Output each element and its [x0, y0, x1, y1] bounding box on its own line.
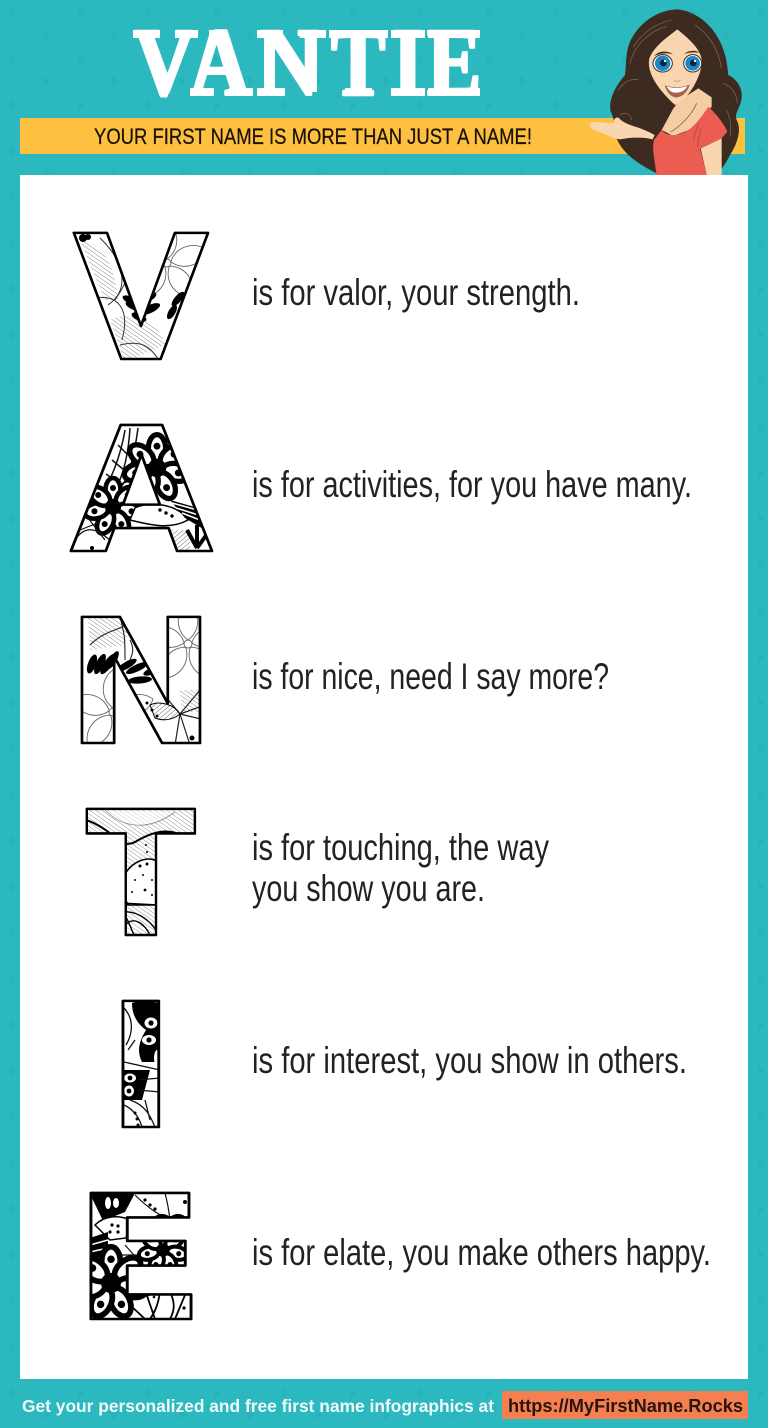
letter A with doodle pattern: A: [70, 391, 213, 593]
shirt: [653, 107, 727, 175]
hair: [610, 9, 742, 175]
letter I with doodle pattern: I: [106, 966, 176, 1168]
eyebrows and mouth: [654, 51, 699, 97]
neck strand: [671, 103, 697, 132]
letter V with doodle pattern: V: [73, 199, 209, 401]
letter E with doodle pattern: E: [73, 1160, 205, 1361]
line text: T: you show you are.: [252, 868, 485, 909]
title: VANTIE: [134, 10, 481, 116]
N black drops: [86, 651, 152, 684]
line text: T: [252, 827, 549, 909]
V black drops: [79, 234, 186, 324]
footer url badge: [502, 1391, 748, 1419]
letter I with doodle pattern: I: [106, 966, 176, 1168]
footer url badge: https://MyFirstName.Rocks: [508, 1396, 743, 1416]
face: [649, 29, 702, 105]
letter E with doodle pattern: [90, 1192, 192, 1320]
illustration: cartoon woman presenting: [590, 9, 742, 175]
tagline banner: YOUR FIRST NAME IS MORE THAN JUST A NAME!: [94, 124, 532, 149]
arm: [701, 138, 722, 175]
white content panel: [20, 175, 748, 1379]
line text: V: is for valor, your strength.: [252, 272, 580, 313]
line text: T: is for touching, the way: [252, 827, 549, 868]
letter T with doodle pattern: T: [86, 776, 196, 976]
letter E with doodle pattern: E: [73, 1160, 205, 1361]
letter T with doodle pattern: T: [86, 776, 196, 976]
tagline banner: [20, 118, 745, 154]
letter N with doodle pattern: N: [65, 583, 217, 784]
hair highlights: [618, 20, 737, 137]
letter V with doodle pattern: [72, 232, 210, 360]
eyes: [653, 55, 702, 72]
letter A with doodle pattern: [70, 424, 214, 552]
hand: [590, 118, 655, 139]
letter T with doodle pattern: [86, 808, 196, 936]
letter A with doodle pattern: A: [70, 391, 213, 593]
neck and chest: [662, 88, 712, 136]
letter V with doodle pattern: V: [73, 199, 209, 401]
V hatching: [80, 240, 118, 300]
footer call to action: Get your personalized and free first name infographics at: [22, 1396, 494, 1416]
letter I with doodle pattern: [122, 1000, 160, 1128]
letter N with doodle pattern: [80, 616, 202, 744]
letter N with doodle pattern: N: [65, 583, 217, 784]
line text: N: is for nice, need I say more?: [252, 656, 609, 697]
title slab serif reinforcement: [133, 30, 480, 96]
shirt fold lines: [693, 123, 701, 147]
